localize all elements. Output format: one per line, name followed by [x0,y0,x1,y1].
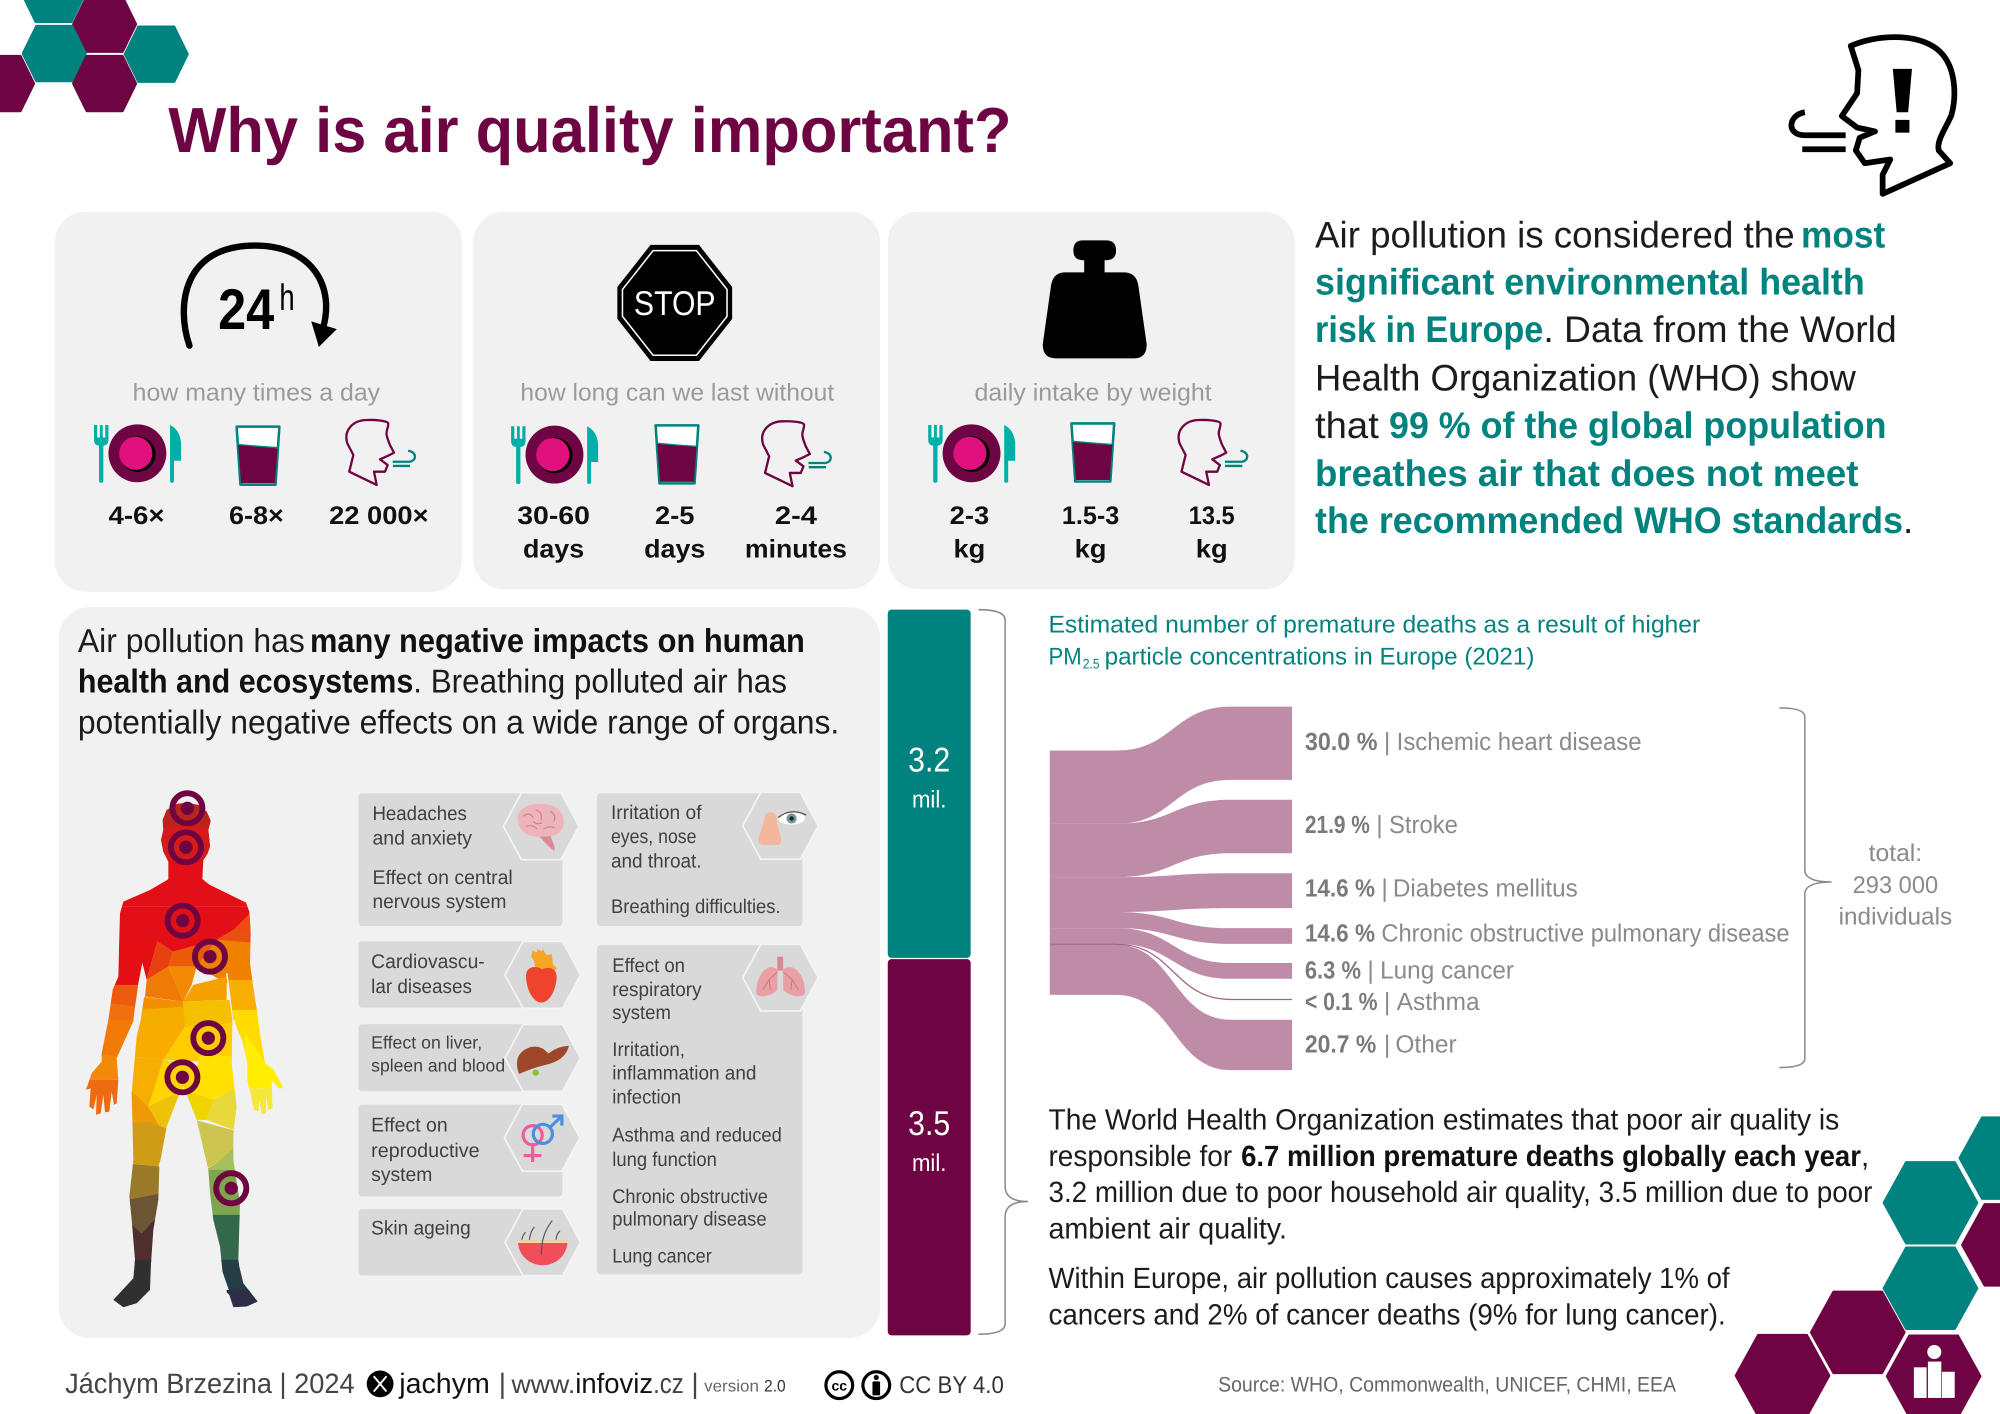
footer: author and links: .cz [653,1367,684,1399]
icon: weight [1043,240,1147,358]
footer: licence: CC BY 4.0 [899,1372,1004,1399]
text block: WHO estimates [1048,1103,1873,1331]
text block: intro paragraph: most [1801,216,1886,256]
icon: CC: cc [831,1379,847,1394]
bar: ambient deaths 3.5 mil [888,959,971,1335]
footer: author and links: version [704,1376,759,1395]
panel: how many times a day [55,212,462,592]
labels: Stroke [1389,811,1458,839]
labels: Ischemic heart disease [1397,728,1642,756]
box: reproductive system: Effect on [371,1115,448,1136]
value: water: kg [1075,536,1107,564]
footer: author and links: Jáchym Brzezina | 2024 [65,1367,355,1399]
labels: | [1381,875,1388,903]
source: Source: WHO, Commonwealth, UNICEF, CHMI, EEA [1218,1374,1676,1397]
human body figure with targets [83,793,287,1310]
labels: 30.0 % [1305,728,1378,756]
total label: total: [1869,841,1922,867]
text block: impacts intro: . Breathing polluted air has [413,662,787,700]
value: air: 22 000× [329,503,429,531]
box: cardiovascular [358,941,580,1008]
box: respiratory system: Chronic obstructive [612,1186,768,1208]
box: liver, spleen, blood [358,1024,580,1091]
icon: head breathing with exclamation mark [1791,37,1954,194]
text block: WHO estimates: 6.7 million premature deaths globally each year [1241,1139,1861,1172]
bracket: sankey total [1779,708,1832,1068]
value: air [1189,503,1235,564]
value: water: days [644,536,705,564]
text block: intro paragraph: Air pollution is considered the [1315,216,1795,256]
footer: author and links: jachym [398,1367,490,1399]
icon: CC [826,1372,853,1399]
box: cardiovascular: Cardiovascu- [371,952,485,973]
footer: author and links [65,1367,786,1399]
text block: intro paragraph: . [1903,501,1913,542]
box: respiratory system: lung function [612,1149,717,1171]
icon: 24 hours arrow: h [279,278,295,319]
bar: ambient deaths 3.5 mil: mil. [912,1150,946,1177]
labels: 14.6 % [1305,875,1375,903]
labels: | [1367,957,1374,985]
box: respiratory system: respiratory [612,980,702,1001]
value: food: kg [953,536,985,564]
text block: intro paragraph: 99 % of the global population [1389,406,1886,447]
labels: | [1384,1031,1390,1059]
text block: impacts intro: many negative impacts on human [310,621,805,659]
footer: author and links: | [691,1367,699,1399]
box: reproductive system [358,1104,580,1196]
text block: WHO estimates: ambient air quality. [1048,1212,1287,1245]
heading: sankey chart: Estimated number of premature deaths as a result of higher [1048,612,1701,639]
text block: WHO estimates: , [1861,1139,1869,1172]
text block: impacts intro: health and ecosystems [78,662,413,700]
labels: < 0.1 % [1305,988,1378,1017]
box: liver, spleen, blood: Effect on liver, [371,1032,482,1052]
icon: stop sign: STOP [634,284,716,323]
text block: intro paragraph: breathes air that does not meet [1315,454,1859,495]
box: eyes, nose and throat: Breathing difficulties. [611,897,781,918]
panel: daily intake by weight [888,212,1295,589]
total label: 293 000 [1853,872,1938,899]
value: air [745,503,847,564]
icon: heart [526,949,557,1003]
value: air: 13.5 [1189,503,1235,531]
icon: breathing head [1179,420,1247,485]
labels: 14.6 % [1305,920,1375,948]
panel: how long can we last without [473,212,880,589]
box: liver, spleen, blood: spleen and blood [371,1055,505,1075]
text block: impacts intro: potentially negative effects on a wide range of organs. [78,703,839,741]
value: food [517,503,590,564]
footer: author and links: 2.0 [764,1376,786,1395]
subtitle: how many times a day [133,380,381,407]
icon: BY [863,1372,890,1399]
text block: intro paragraph: risk in Europe [1315,310,1543,351]
value: food: 4-6× [108,503,165,531]
icon: plate [511,426,598,484]
footer: author and links: | [499,1367,506,1399]
icon: stop sign [617,245,732,361]
labels: Chronic obstructive pulmonary disease [1381,920,1790,948]
box: respiratory system: inflammation and [612,1063,756,1085]
bar: household deaths 3.2 mil: 3.2 [908,741,950,779]
icon: plate [928,424,1015,483]
bar: household deaths 3.2 mil: mil. [912,787,946,814]
text block: WHO estimates: The World Health Organization estimates that poor air quality is [1048,1103,1839,1136]
icon: glass [1071,423,1114,481]
box: skin ageing [358,1209,580,1276]
heading: sankey chart: particle concentrations in Europe (2021) [1105,644,1534,671]
value: food: days [523,536,584,564]
box: respiratory system [597,944,818,1274]
labels: | [1384,728,1390,756]
text block: intro paragraph [1315,216,1913,542]
text block: impacts intro [78,621,839,741]
labels: 6.3 % [1305,957,1361,985]
box: eyes, nose and throat: eyes, nose [611,827,696,848]
labels: Diabetes mellitus [1393,875,1578,903]
box: central nervous system: nervous system [372,892,506,913]
box: eyes, nose and throat: and throat. [611,851,702,872]
icon: 24 hours arrow [184,246,337,347]
box: reproductive system: system [371,1165,432,1186]
icon: gender symbols [523,1116,562,1162]
box: reproductive system: reproductive [371,1140,480,1162]
value: water [644,503,705,564]
icon: infoviz logo hexagon [1887,1336,1980,1414]
text block: WHO estimates: Within Europe, air pollution causes approximately 1% of [1048,1261,1730,1295]
value: water: 2-5 [655,503,695,531]
footer: licence [826,1372,1004,1399]
labels: 20.7 % [1305,1031,1376,1059]
box: central nervous system: and anxiety [372,828,472,849]
box: respiratory system: Effect on [612,955,685,977]
bar: ambient deaths 3.5 mil: 3.5 [908,1105,950,1143]
ribbons [1050,707,1292,1070]
bracket: bars to text [978,610,1028,1334]
icon: liver [517,1046,569,1076]
text block: intro paragraph: Health Organization (WHO) show [1315,358,1857,399]
icon: nose and eye [758,812,806,845]
box: eyes, nose and throat: Irritation of [611,802,702,824]
total label [1839,841,1952,931]
box: central nervous system: Headaches [372,804,467,825]
text block: intro paragraph: significant environmental health [1315,263,1865,304]
box: respiratory system: infection [612,1087,681,1108]
heading: sankey chart: PM [1048,644,1082,671]
labels: Lung cancer [1380,957,1515,985]
icon: X logo [367,1371,394,1397]
value: food: 2-3 [950,503,989,531]
box: respiratory system: Lung cancer [612,1246,712,1268]
value: food: 30-60 [517,503,590,531]
box: skin ageing: Skin ageing [371,1218,471,1240]
value: air: kg [1196,536,1228,564]
subtitle: daily intake by weight [974,380,1213,407]
labels: Other [1395,1031,1457,1059]
icon: lungs [756,957,805,996]
total label: individuals [1839,904,1952,931]
subtitle: how long can we last without [520,380,835,407]
value: water [1062,503,1119,564]
title: Why is air quality important? [168,94,1011,166]
text block: intro paragraph: . Data from the World [1543,310,1897,351]
value: water: 1.5-3 [1062,503,1119,531]
icon: skin [518,1221,568,1265]
text block: impacts intro: Air pollution has [78,621,305,659]
labels: 21.9 % [1305,811,1370,839]
bar: household deaths 3.2 mil [888,610,971,958]
labels: | [1384,988,1390,1017]
box: respiratory system: pulmonary disease [612,1209,767,1231]
box: respiratory system: Asthma and reduced [612,1125,782,1147]
box: central nervous system [358,793,579,926]
box: respiratory system: system [612,1003,671,1024]
box: eyes, nose and throat [597,792,818,926]
labels [1305,728,1790,1059]
text block: WHO estimates: cancers and 2% of cancer deaths (9% for lung cancer). [1048,1298,1726,1331]
value: air: 2-4 [775,503,818,531]
box: respiratory system: Irritation, [612,1040,685,1061]
icon: brain [518,804,564,851]
sankey chart [1050,707,1790,1070]
value: water: 6-8× [229,503,284,531]
footer: author and links: www. [510,1371,575,1399]
decorative hexagons top left [0,0,188,111]
text block: intro paragraph: the recommended WHO standards [1315,501,1903,542]
icon: glass [237,427,279,485]
text block: WHO estimates: responsible for [1048,1139,1233,1172]
labels: | [1376,811,1383,839]
text block: WHO estimates: 3.2 million due to poor household air quality, 3.5 million due to poor [1048,1175,1873,1209]
box: central nervous system: Effect on central [372,867,513,889]
value: air: minutes [745,536,847,564]
icon: breathing head [762,421,831,486]
labels: Asthma [1397,988,1480,1017]
decorative hexagons bottom right [1736,1118,2000,1414]
value: food [950,503,989,564]
text block: intro paragraph: that [1315,406,1379,447]
icon: plate [94,424,181,483]
heading: sankey chart [1048,612,1701,672]
heading: sankey chart: 2.5 [1083,657,1099,672]
footer: author and links: infoviz [575,1367,653,1399]
box: cardiovascular: lar diseases [371,976,472,998]
icon: glass [656,425,698,483]
panel: health impacts [59,607,880,1338]
icon: 24 hours arrow: 24 [218,277,274,342]
icon: breathing head [346,420,415,485]
